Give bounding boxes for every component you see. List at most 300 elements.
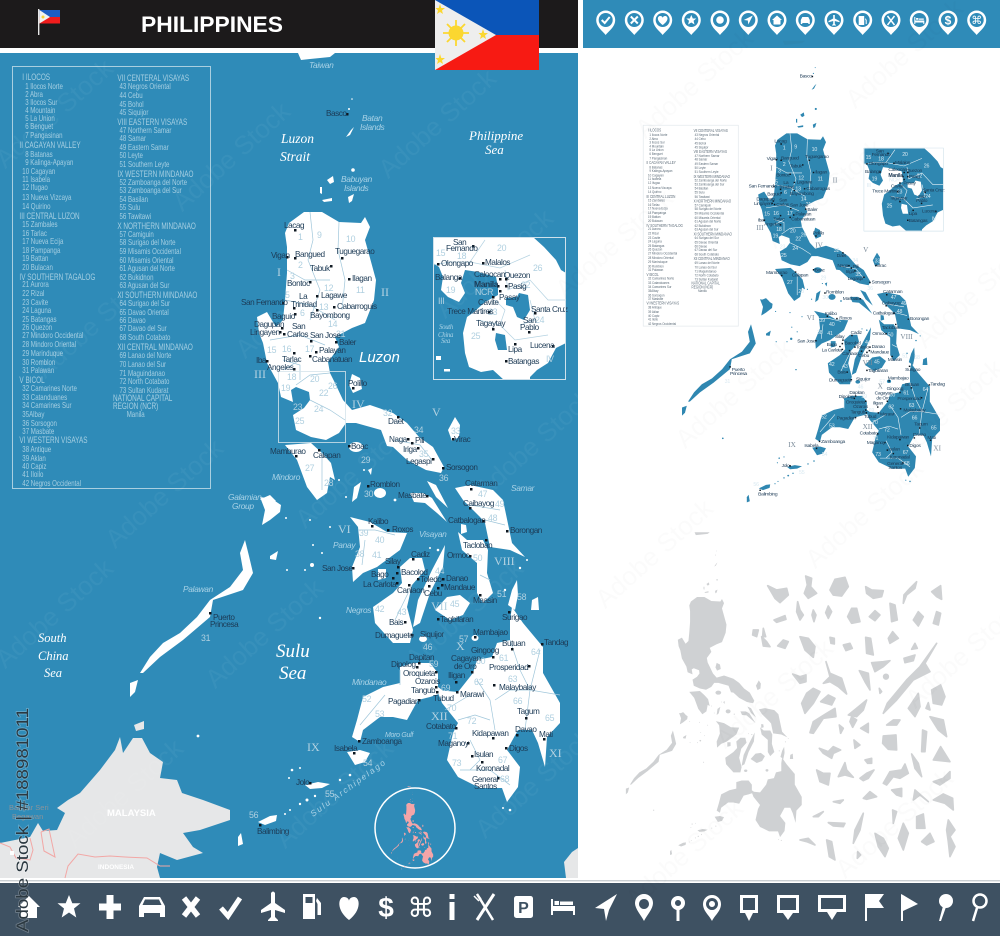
inset frame on main map xyxy=(278,372,346,442)
map: city labels and markers: Iriga xyxy=(403,445,418,454)
map: region numbers: 61 xyxy=(499,653,509,663)
legend: provinces list panel: 36 Sorsogon xyxy=(22,418,57,428)
map: city labels and markers: Angeles xyxy=(267,363,294,372)
labels: sea and geographic names: Babuyan xyxy=(341,174,373,184)
labels: sea and geographic names xyxy=(9,60,536,871)
map: region numbers: 63 xyxy=(508,674,518,684)
map: city labels and markers: Pagadian xyxy=(388,697,420,706)
map: city labels and markers: Vigan xyxy=(271,251,290,260)
legend: small province list xyxy=(643,125,738,326)
labels: sea and geographic names: Palawan xyxy=(183,584,214,594)
labels: sea and geographic names: Samar xyxy=(511,483,536,493)
map: city labels and markers: Palayan xyxy=(319,346,346,355)
inset: Manila region: III xyxy=(438,296,444,306)
map: roman region numerals: VII xyxy=(431,599,448,613)
legend: provinces list panel: 24 Laguna xyxy=(22,305,52,315)
map: city labels and markers: Boac xyxy=(351,442,368,451)
inset: Manila region: NCR xyxy=(475,287,493,297)
icon: fork and knife xyxy=(474,894,494,920)
map: roman region numerals: V xyxy=(432,405,441,419)
map: city labels and markers: Virac xyxy=(454,435,471,444)
map: region numbers: 62 xyxy=(474,677,484,687)
city labels on blue map xyxy=(729,74,945,497)
map: region numbers: 34 xyxy=(414,425,424,435)
legend: provinces list panel: 37 Masbate xyxy=(22,426,54,436)
map: region numbers: 71 xyxy=(448,731,458,741)
map: city labels and markers: Tacloban xyxy=(463,541,493,550)
map: blue regional map (right) xyxy=(682,41,945,502)
icon: pin check xyxy=(596,10,615,35)
legend: provinces list panel: REGION (NCR) xyxy=(113,401,159,411)
icon: ring pin tilted xyxy=(973,894,986,921)
legend: provinces list panel: 43 Negros Oriental xyxy=(120,81,171,91)
map: city labels and markers: Prosperidad xyxy=(489,663,529,672)
legend: provinces list panel: 53 Zamboanga del Sur xyxy=(120,185,182,195)
inset on blue map xyxy=(864,148,945,231)
legend: provinces list panel: 65 Davao Oriental xyxy=(120,307,169,317)
icon: square pin medium xyxy=(777,895,799,920)
legend: provinces list panel: 22 Rizal xyxy=(22,288,45,298)
icon: home xyxy=(18,896,40,918)
map: city labels and markers: Tagum xyxy=(517,707,540,716)
map: region numbers: 25 xyxy=(295,416,305,426)
icon: pin dollar xyxy=(938,10,958,35)
labels: sea and geographic names: Taiwan xyxy=(309,60,334,70)
map: roman region numerals: VI xyxy=(338,522,351,536)
map: region numbers: 44 xyxy=(435,566,445,576)
labels: sea and geographic names: Group xyxy=(232,501,254,511)
icon: square pin wide xyxy=(818,895,846,920)
map: city labels and markers: Legaspi xyxy=(406,457,432,466)
legend: provinces list panel: 26 Quezon xyxy=(22,322,52,332)
legend: provinces list panel: Manila xyxy=(127,409,145,419)
inset: Manila region: 22 xyxy=(521,280,531,290)
watermark: faint diagonal stock marks: Adobe Stock xyxy=(199,572,330,694)
map: city labels and markers: Malaybalay xyxy=(499,683,537,692)
icon: heart xyxy=(339,897,359,920)
inset: Manila region: 19 xyxy=(446,285,456,295)
inset: Manila region: Balanga xyxy=(435,273,463,282)
map: city labels and markers: Canlaon xyxy=(397,586,425,595)
icon: car xyxy=(139,897,165,917)
inset: Manila region: Cavite xyxy=(478,298,499,307)
map: region numbers: 65 xyxy=(545,713,555,723)
inset: Manila region: 24 xyxy=(535,315,545,325)
legend: provinces list panel: 12 Ifugao xyxy=(22,182,48,192)
map: city labels and markers: Iligan xyxy=(448,671,466,680)
map: region numbers: 2 xyxy=(298,260,303,270)
legend: provinces list panel: 50 Leyte xyxy=(120,150,143,160)
map: city labels and markers: Bago xyxy=(371,570,389,579)
watermark: faint diagonal stock marks xyxy=(0,52,600,854)
map: city labels and markers: Tandag xyxy=(544,638,569,647)
legend: provinces list panel: 45 Siquijor xyxy=(120,107,149,117)
legend: provinces list panel: 45 Bohol xyxy=(120,99,144,109)
inset: Manila region: Fernando xyxy=(446,244,478,253)
legend: provinces list panel: 44 Cebu xyxy=(120,90,143,100)
icon: navigation xyxy=(595,894,617,921)
legend: provinces list panel: 2 Abra xyxy=(25,89,44,99)
labels: sea and geographic names: Begawan xyxy=(12,812,43,821)
vertical stock id: Adobe Stock | #188981011 xyxy=(13,708,32,932)
icon: fuel xyxy=(303,894,321,919)
region borders on blue map xyxy=(766,133,940,467)
map: city labels and markers: Digos xyxy=(509,744,528,753)
map: grey silhouette xyxy=(626,532,802,855)
legend: provinces list panel: 40 Capiz xyxy=(22,461,47,471)
map: city labels and markers: Danao xyxy=(446,574,469,583)
map: region numbers: 17 xyxy=(305,344,315,354)
icon: small pin xyxy=(671,896,685,921)
legend: provinces list panel: 49 Eastern Samar xyxy=(120,142,169,152)
icon: check xyxy=(221,898,240,916)
map: city labels and markers: Cabarroguis xyxy=(337,302,377,311)
map: city labels and markers: Tarlac xyxy=(282,355,301,364)
legend: provinces list panel: X NORTHERN MINDANAO xyxy=(117,221,196,231)
map: city labels and markers: Roxos xyxy=(392,525,413,534)
legend: provinces list panel: 16 Tarlac xyxy=(22,228,47,238)
legend: provinces list panel: 58 Surigao del Norte xyxy=(120,237,176,247)
inset: Manila region: Quezon xyxy=(504,271,531,280)
icon: pin restaurant xyxy=(882,10,900,35)
map: city labels and markers: Mamburao xyxy=(270,447,306,456)
map: roman region numerals: II xyxy=(381,285,389,299)
map: city labels and markers: Davao xyxy=(515,725,537,734)
map: region numbers: 16 xyxy=(282,344,292,354)
legend: provinces list panel: 30 Romblon xyxy=(22,357,55,367)
map: city labels and markers: Mambajao xyxy=(473,628,509,637)
labels: sea and geographic names: Visayan xyxy=(419,529,447,539)
legend: provinces list panel: 33 Catanduanes xyxy=(22,392,67,402)
labels: sea and geographic names: INDONESIA xyxy=(98,864,134,871)
map: city labels and markers: La xyxy=(299,292,308,301)
legend: provinces list panel: 32 Camarines Norte xyxy=(22,383,77,393)
map: region numbers: 31 xyxy=(201,633,211,643)
legend: provinces list panel: VII CENTERAL VISAYAS xyxy=(117,73,189,83)
map: city labels and markers: San Jose xyxy=(322,564,353,573)
watermark: faint diagonal stock marks: Adobe Stock xyxy=(269,732,400,854)
legend: provinces list panel: 34 Camarines Sur xyxy=(22,400,72,410)
map: region numbers: 5 xyxy=(285,290,290,300)
legend: provinces list panel: 69 Lanao del Norte xyxy=(120,350,171,360)
roman numerals on blue map xyxy=(756,165,942,453)
map: roman region numerals: XII xyxy=(431,709,448,723)
labels: sea and geographic names: Mindoro xyxy=(272,472,301,482)
map: region numbers: 22 xyxy=(319,388,329,398)
map: city labels and markers: Naga xyxy=(389,435,408,444)
map: city labels and markers: Daet xyxy=(388,417,405,426)
map: region numbers: 35 xyxy=(419,449,429,459)
icon: info xyxy=(450,894,454,920)
legend: provinces list panel: 66 Davao xyxy=(120,315,146,325)
map: region numbers: 70 xyxy=(447,703,457,713)
icon: dollar: $ xyxy=(378,892,394,923)
map: city labels and markers: Tagbilaran xyxy=(440,615,474,624)
inset: Manila region: 18 xyxy=(457,251,467,261)
legend: provinces list panel: 55 Sulu xyxy=(120,202,140,212)
legend: provinces list panel: 15 Zambales xyxy=(22,219,58,229)
legend: provinces list panel: 1 Ilocos Norte xyxy=(25,81,63,91)
map: region numbers: 6 xyxy=(300,308,305,318)
icon: cross xyxy=(184,898,198,916)
map: city labels and markers: Basco xyxy=(326,109,347,118)
icon: command: ⌘ xyxy=(408,893,434,924)
legend: provinces list panel: 59 Misamis Occidental xyxy=(120,246,181,256)
icon: large Philippine flag xyxy=(435,0,539,70)
map: city labels and markers: Tangub xyxy=(411,686,436,695)
inset: Manila region: Trece Martires xyxy=(447,307,494,316)
map: region numbers: 45 xyxy=(450,599,460,609)
inset: Manila region: Santa Cruz xyxy=(531,305,568,314)
icon: pin star xyxy=(682,10,701,35)
map: region numbers: 40 xyxy=(375,535,385,545)
icon: square pin narrow xyxy=(740,895,758,921)
watermark: faint diagonal stock marks: Adobe Stock xyxy=(372,62,503,184)
labels: sea and geographic names: Mindanao xyxy=(352,677,387,687)
legend: provinces list panel: 23 Cavite xyxy=(22,297,48,307)
map: city labels and markers: Caibayog xyxy=(463,499,495,508)
labels: sea and geographic names: Islands xyxy=(344,183,370,193)
map: city labels and markers: Isabela xyxy=(334,744,358,753)
map: region numbers: 49 xyxy=(495,499,505,509)
map: city labels and markers: Borongan xyxy=(510,526,543,535)
map: region numbers: 42 xyxy=(375,604,385,614)
map: city labels and markers: Ormoc xyxy=(447,551,470,560)
map: region numbers: 58 xyxy=(517,592,527,602)
watermark: faint diagonal stock marks: Adobe Stock xyxy=(166,95,297,217)
legend: provinces list panel: 21 Aurora xyxy=(22,279,50,289)
map: city labels and markers: Dapitan xyxy=(409,653,435,662)
legend: provinces list panel: 72 North Cotabato xyxy=(120,376,169,386)
labels: sea and geographic names: Islands xyxy=(360,122,386,132)
map: region numbers: 67 xyxy=(498,755,508,765)
labels: sea and geographic names: China xyxy=(38,649,69,663)
map: city labels and markers: Balimbing xyxy=(257,827,290,836)
map: region numbers: 28 xyxy=(324,478,334,488)
map: region numbers xyxy=(201,230,555,820)
map: city labels and markers: Baguio xyxy=(272,312,296,321)
icon: pin fuel xyxy=(853,10,872,35)
map: region numbers: 57 xyxy=(459,634,469,644)
map: region numbers: 20 xyxy=(310,374,320,384)
legend: provinces list panel: 73 Sultan Kudarat xyxy=(120,385,168,395)
icon: flag xyxy=(865,894,884,921)
legend: provinces list panel: 35Albay xyxy=(22,409,45,419)
legend: provinces list panel: 41 Iloilo xyxy=(22,469,43,479)
legend: provinces list panel: 62 Bukidnon xyxy=(120,272,153,282)
labels: sea and geographic names: Galamian xyxy=(228,492,262,502)
map: Philippine islands (main white) xyxy=(130,53,560,846)
watermark: faint diagonal stock marks: Adobe Stock xyxy=(289,412,420,534)
legend: provinces list panel: 68 South Cotabato xyxy=(120,332,170,342)
labels: sea and geographic names: MALAYSIA xyxy=(107,808,156,819)
icon: small flag on pole xyxy=(38,9,60,35)
legend: provinces list panel: 52 Zamboanga del Norte xyxy=(120,177,187,187)
map: city labels and markers: San Jose xyxy=(310,331,341,340)
icon: parking: P xyxy=(518,900,529,917)
map: city labels and markers: Dumaguete xyxy=(375,631,414,640)
icon: plane xyxy=(261,892,285,921)
inset: Manila region: Caloocan xyxy=(474,270,506,279)
map: city labels and markers: Baler xyxy=(339,338,357,347)
header bar xyxy=(0,0,578,48)
inset: Manila region: Pasay xyxy=(499,293,521,302)
inset: Manila region: 25 xyxy=(471,331,481,341)
inset: Manila region xyxy=(433,237,568,380)
legend: provinces list panel: 61 Agusan del Norte xyxy=(120,263,175,273)
legend: provinces list panel: 38 Antique xyxy=(22,444,51,454)
map: region numbers: 46 xyxy=(423,642,433,652)
legend: provinces list panel: 42 Negros Occidental xyxy=(22,478,81,488)
icon: pennant xyxy=(901,894,918,921)
map: region numbers: 29 xyxy=(361,455,371,465)
map: region numbers: 52 xyxy=(362,694,372,704)
map: region numbers: 72 xyxy=(467,716,477,726)
map: city labels and markers: Oroquieta xyxy=(403,669,436,678)
map: city labels and markers: Santos xyxy=(474,782,497,791)
map: region numbers: 23 xyxy=(293,402,303,412)
map: region numbers: 68 xyxy=(500,774,510,784)
map: city labels and markers: Silay xyxy=(385,557,402,566)
legend: provinces list panel: 5 La Union xyxy=(25,113,55,123)
icon: star xyxy=(58,895,80,918)
icon: pin cross xyxy=(625,10,644,35)
map: roman region numerals: VIII xyxy=(494,554,515,568)
labels: sea and geographic names: Sea xyxy=(279,663,306,684)
legend: provinces list panel: 6 Benguet xyxy=(25,121,53,131)
labels: sea and geographic names: Strait xyxy=(280,149,311,164)
map: region numbers: 11 xyxy=(356,285,365,295)
map: city labels and markers: Surigao xyxy=(502,613,528,622)
map: region numbers: 9 xyxy=(317,230,322,240)
labels: sea and geographic names: Sea xyxy=(485,142,504,157)
legend: provinces list panel: VI WESTERN VISAYAS xyxy=(19,435,88,445)
legend: provinces list panel: 3 Ilocos Sur xyxy=(25,97,58,107)
inset: Manila region: Pasig xyxy=(508,282,527,291)
region numbers on blue map xyxy=(725,145,937,488)
legend: provinces list panel: 60 Misamis Oriental xyxy=(120,255,174,265)
watermark: faint diagonal stock marks: Adobe Stock xyxy=(229,242,360,364)
map: city labels and markers: Romblon xyxy=(370,480,401,489)
map: city labels and markers: Tuguegarao xyxy=(335,247,375,256)
legend: provinces list panel: II CAGAYAN VALLEY xyxy=(19,140,81,150)
watermark: faint diagonal stock marks: Adobe Stock xyxy=(59,732,190,854)
map: city labels and markers: de Oro xyxy=(454,662,477,671)
labels: sea and geographic names: Bandar Seri xyxy=(9,803,49,812)
map: region numbers: 59 xyxy=(429,659,439,669)
map: region numbers: 55 xyxy=(325,789,335,799)
legend: provinces list panel: 64 Surigao del Sur xyxy=(120,298,171,308)
map: region numbers: 38 xyxy=(355,549,365,559)
inset: Manila region: Olongapo xyxy=(441,259,474,268)
labels: sea and geographic names: Batan xyxy=(362,113,383,123)
map: city labels and markers: Lagawe xyxy=(321,291,348,300)
legend: provinces list panel: IV SOUTHERN TAGALOG xyxy=(19,272,95,282)
map: city labels and markers: Dipolog xyxy=(391,660,417,669)
map: region numbers: 32 xyxy=(383,408,393,418)
map: region numbers: 1 xyxy=(298,232,303,242)
legend: provinces list panel: 20 Bulacan xyxy=(22,262,53,272)
map: roman region numerals: XI xyxy=(549,746,562,760)
map: city labels and markers: Tubud xyxy=(433,694,455,703)
legend: provinces list panel: 13 Nueva Vizcaya xyxy=(22,192,72,202)
icon: pin bed xyxy=(910,10,929,35)
map: region numbers: 21 xyxy=(336,329,346,339)
map: roman region numerals: I xyxy=(277,265,281,279)
map: city labels and markers: Marawi xyxy=(460,690,484,699)
map: region numbers: 15 xyxy=(267,345,277,355)
inset: Manila region: Batangas xyxy=(508,357,539,366)
map: city labels and markers: Ozarois xyxy=(415,677,440,686)
labels: sea and geographic names: Sulu xyxy=(276,641,310,662)
map: province borders xyxy=(270,212,560,785)
map: city labels and markers: Lingayen xyxy=(250,328,281,337)
map: city labels and markers xyxy=(209,109,569,836)
map: region numbers: 66 xyxy=(513,696,523,706)
map: city labels and markers: Pili xyxy=(415,436,425,445)
inset: Manila region: 15 xyxy=(436,248,446,258)
map: region numbers: 60 xyxy=(476,656,486,666)
map: city labels and markers: Koronadal xyxy=(476,764,510,773)
labels: sea and geographic names: Sulu Archipelago xyxy=(308,757,388,819)
title: PHILIPPINES xyxy=(141,12,283,37)
labels: sea and geographic names: Philippine xyxy=(468,128,523,143)
map: city labels and markers: Polillo xyxy=(348,379,368,388)
watermark: faint diagonal stock marks on white side xyxy=(549,0,1000,914)
map: city labels and markers: Trinidad xyxy=(291,300,318,309)
map: city labels and markers: Sorsogon xyxy=(446,463,478,472)
inset: Manila region: San xyxy=(453,238,467,247)
legend: provinces list panel: 29 Marinduque xyxy=(22,348,63,358)
legend: provinces list panel: 10 Cagayan xyxy=(22,166,55,176)
map: region numbers: 41 xyxy=(372,550,382,560)
map: region numbers: 13 xyxy=(319,302,329,312)
inset: Manila region: Sea xyxy=(441,338,451,345)
map: city labels and markers: Butuan xyxy=(502,639,526,648)
map: city labels and markers: Kalibo xyxy=(368,517,389,526)
legend: provinces list panel: 7 Pangasinan xyxy=(25,130,63,140)
map: roman region numerals xyxy=(254,265,562,760)
legend: provinces list panel: 8 Batanas xyxy=(25,149,53,159)
map: city labels and markers: Mandaue xyxy=(444,583,476,592)
legend: provinces list panel: 19 Battan xyxy=(22,253,48,263)
map: city labels and markers: Ilagan xyxy=(352,274,373,283)
legend: provinces list panel: XII CENTRAL MINDANAO xyxy=(117,342,193,352)
inset: Manila region: IV xyxy=(546,354,554,364)
map: city labels and markers: Toledo xyxy=(420,575,442,584)
inset: Manila region: Tagaytay xyxy=(476,319,507,328)
map: region numbers: 56 xyxy=(249,810,259,820)
watermark: faint diagonal stock marks: Adobe Stock xyxy=(29,262,160,384)
map: region numbers: 39 xyxy=(359,528,369,538)
map: region numbers: 64 xyxy=(531,647,541,657)
inset: Manila region: 26 xyxy=(533,263,543,273)
map: city labels and markers: General xyxy=(472,775,499,784)
map: city labels and markers: Bacolod xyxy=(401,568,428,577)
map: city labels and markers: La Carlota xyxy=(363,580,397,589)
labels: sea and geographic names: South xyxy=(38,631,66,645)
map: region numbers: 47 xyxy=(478,489,488,499)
watermark: faint diagonal stock marks: Adobe Stock xyxy=(469,382,600,504)
legend: provinces list panel: 18 Pampanga xyxy=(22,245,61,255)
legend: provinces list panel: 63 Agusan del Sur xyxy=(120,280,170,290)
inset: Manila region: 20 xyxy=(497,243,507,253)
map: city labels and markers: Cagayan xyxy=(451,654,482,663)
watermark: faint diagonal stock marks: Adobe Stock xyxy=(469,722,600,844)
icon: bed xyxy=(551,899,575,915)
legend: provinces list panel: 51 Southern Leyte xyxy=(120,159,169,169)
legend: provinces list panel: VIII EASTERN VISAYAS xyxy=(117,117,187,127)
